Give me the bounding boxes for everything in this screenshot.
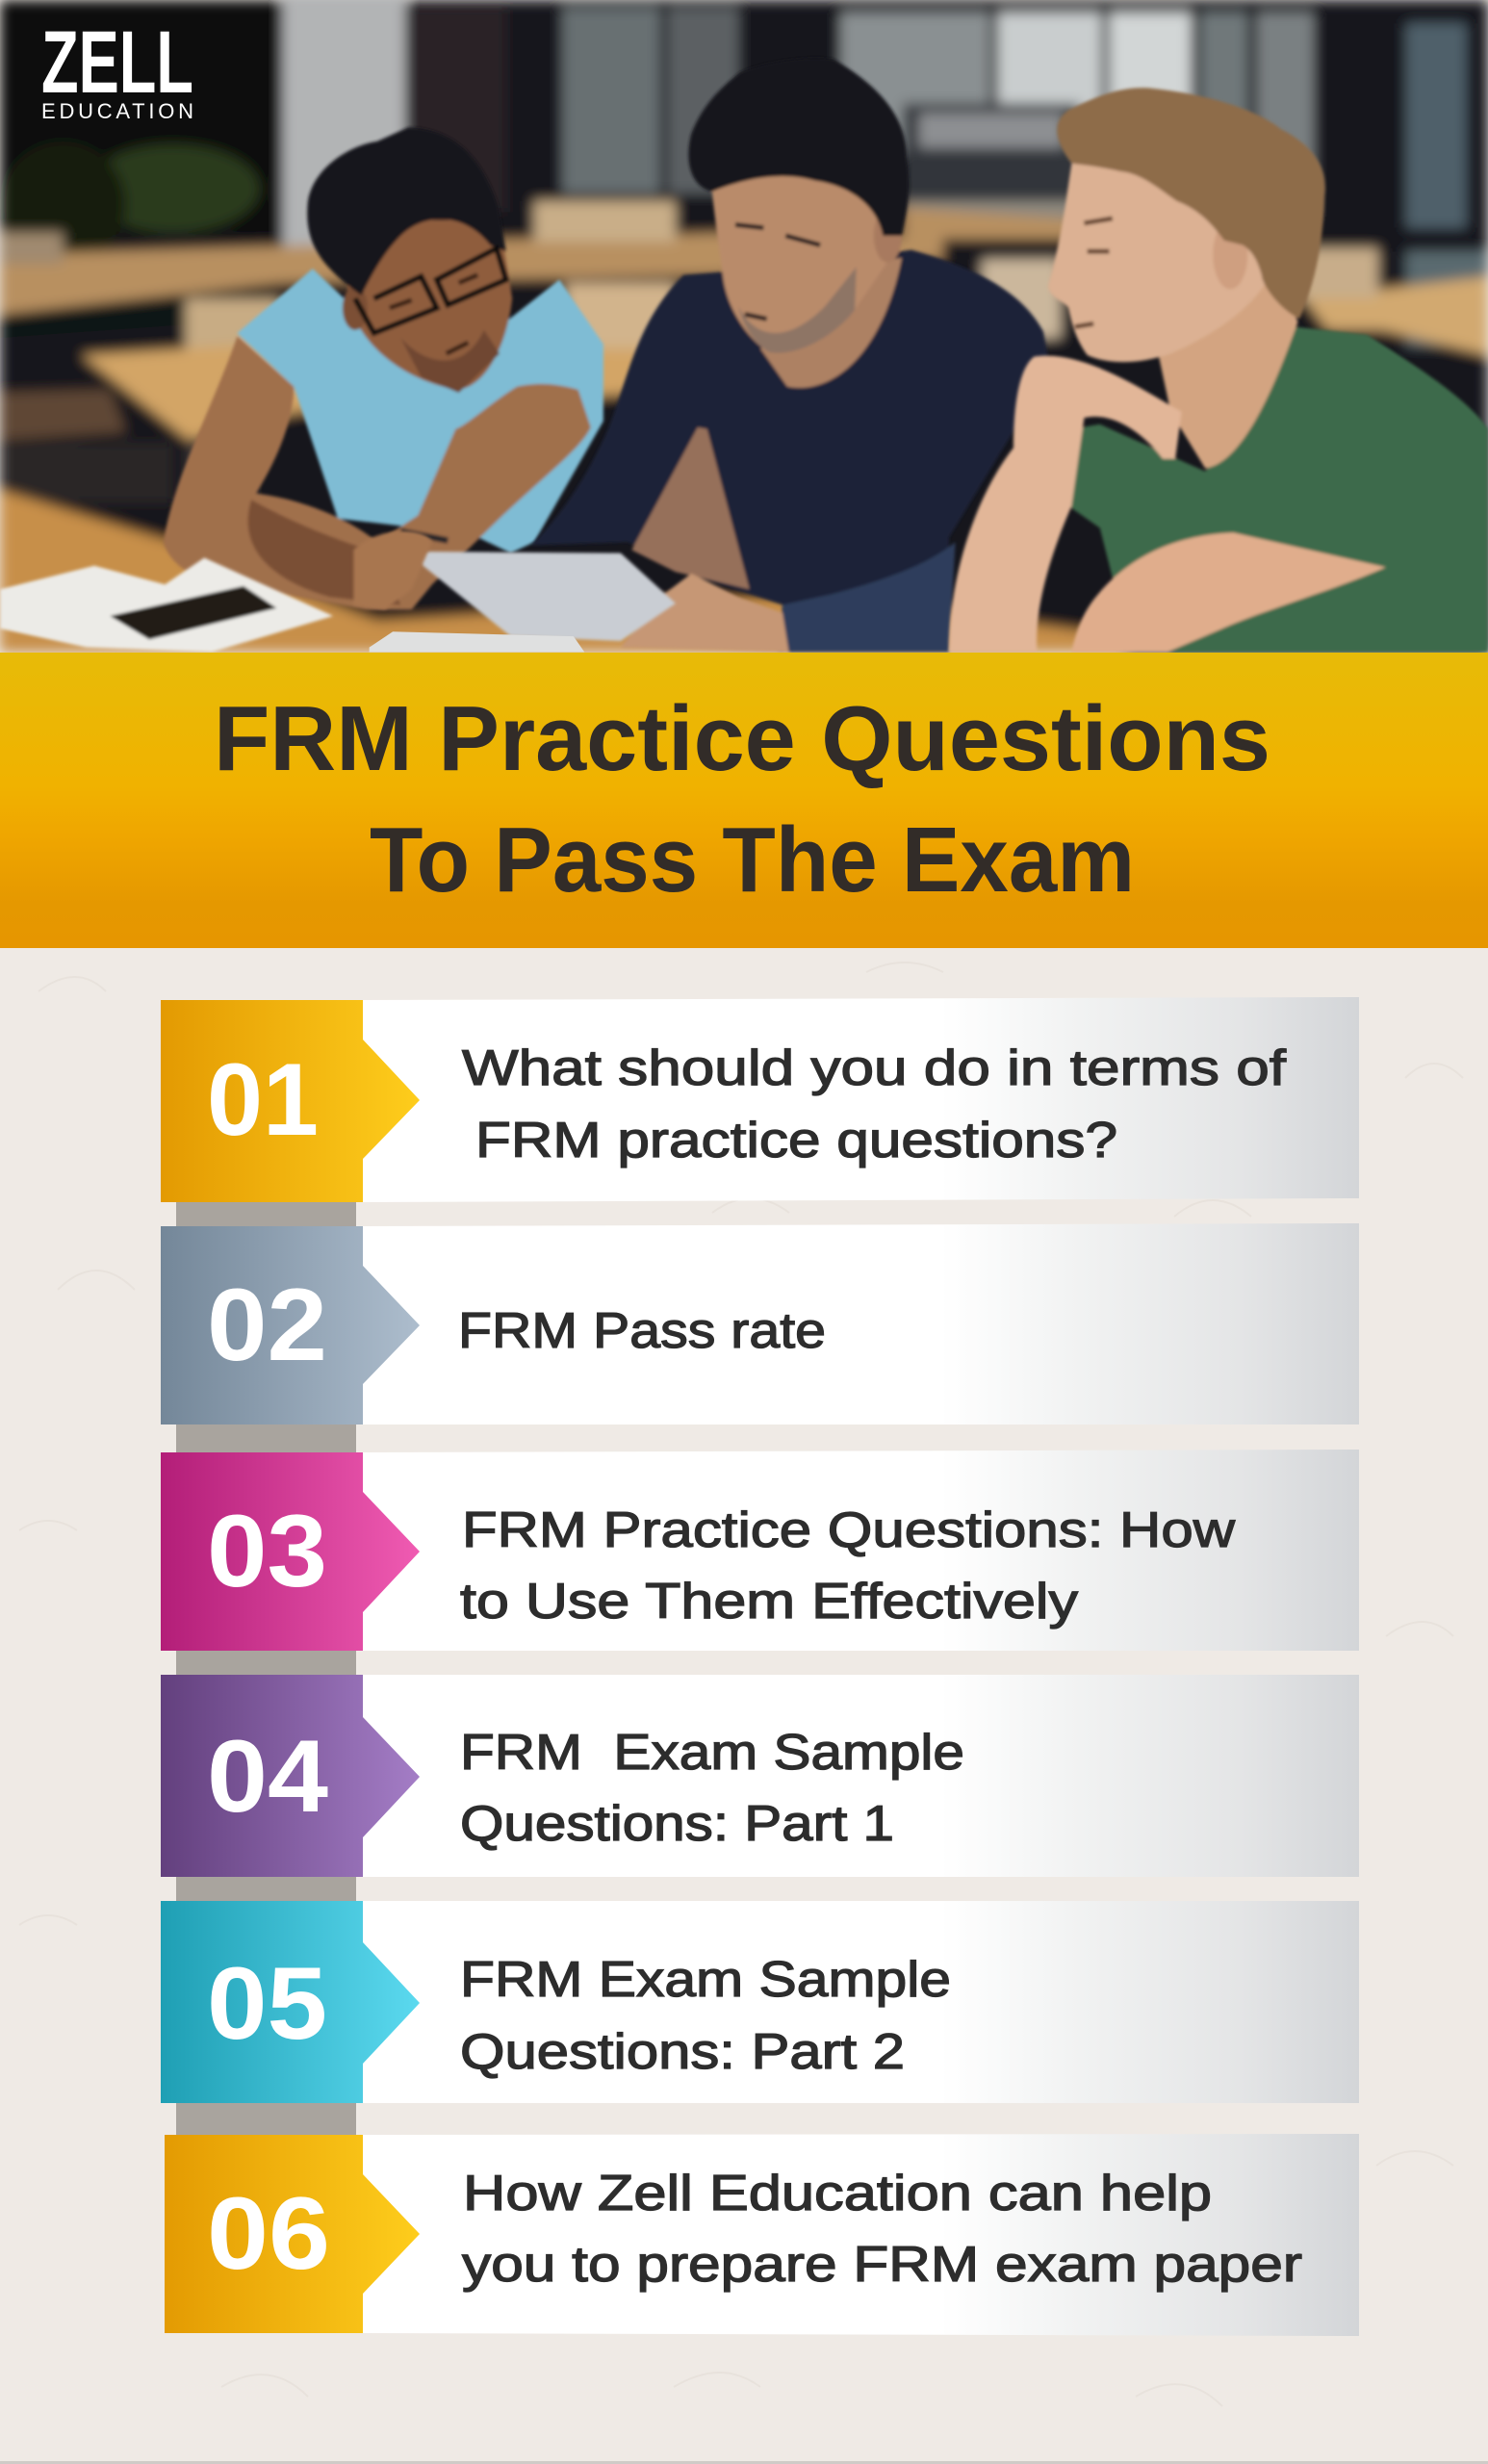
number 02: 02: [207, 1267, 327, 1382]
logo: Zell Education: [41, 13, 193, 123]
heading: To Pass The Exam: [370, 808, 1135, 911]
tablet: [405, 552, 676, 641]
stool seen through the arm gap: [631, 427, 750, 589]
mid table: [82, 346, 644, 440]
item 04: [161, 1675, 1359, 1877]
text 05: FRM Exam Sample: [460, 1952, 951, 2008]
tab and arrow 02: [161, 1226, 420, 1424]
middle man eyes and mouth: [735, 224, 820, 319]
text 04: [460, 1725, 964, 1852]
middle man hair: [688, 58, 909, 236]
middle man sweater: [530, 247, 1048, 607]
panel 05: [363, 1901, 1359, 2103]
right man eye and mouth: [1075, 218, 1113, 327]
text 03: to Use Them Effectively: [460, 1574, 1078, 1630]
tab and arrow 04: [161, 1675, 420, 1877]
text 06: How Zell Education can help: [463, 2166, 1212, 2221]
number 06: 06: [207, 2175, 330, 2291]
left student glasses: [355, 248, 506, 333]
person: right man: [949, 88, 1488, 652]
right man ear: [1213, 220, 1247, 289]
text 03: FRM Practice Questions: How: [462, 1502, 1236, 1558]
left student hair: [307, 127, 506, 295]
left student eyes and mouth: [390, 275, 477, 353]
text 04: FRM Exam Sample: [460, 1725, 964, 1781]
text 05: [460, 1952, 951, 2080]
middle man hand on tablet: [621, 574, 789, 652]
far table: [0, 233, 942, 314]
right man hair: [1057, 88, 1325, 319]
logo wordmark: ZELL: [41, 13, 193, 112]
item 02: [161, 1223, 1359, 1424]
left student arms: [164, 336, 591, 609]
heading: FRM Practice Questions: [214, 687, 1270, 790]
item 06: [165, 2134, 1359, 2336]
panel 04: [363, 1675, 1359, 1877]
logo subtitle: EDUCATION: [41, 99, 193, 123]
text 04: Questions: Part 1: [460, 1796, 894, 1852]
left student face: [347, 220, 512, 390]
number 01: 01: [207, 1041, 319, 1157]
text 03: [460, 1502, 1236, 1630]
text 01: [462, 1040, 1287, 1168]
title band: [0, 653, 1488, 948]
item 03: [161, 1450, 1359, 1651]
left student hand: [353, 531, 432, 609]
tab and arrow 05: [161, 1901, 420, 2103]
right man arm: [949, 356, 1182, 652]
text 05: Questions: Part 2: [460, 2024, 905, 2080]
heading: [214, 687, 1270, 911]
tab and arrow 03: [161, 1452, 420, 1651]
number 03: 03: [207, 1493, 327, 1608]
panel 01: [363, 997, 1359, 1202]
text 02: FRM Pass rate: [458, 1303, 826, 1359]
near table: [0, 490, 1123, 652]
connector strips: [176, 1202, 356, 2136]
panel 02: [363, 1223, 1359, 1424]
left student shirt: [238, 269, 603, 553]
right man neck: [1155, 259, 1297, 468]
item 05: [161, 1901, 1359, 2103]
right man shirt: [1068, 327, 1488, 652]
person: middle man: [531, 58, 1048, 652]
person: left student: [164, 127, 603, 609]
panel 06: [363, 2134, 1359, 2336]
tab and arrow 01: [161, 1000, 420, 1202]
photo: three students studying with a tablet: [0, 0, 1488, 652]
panel 03: [363, 1450, 1359, 1651]
number 05: 05: [207, 1945, 327, 2061]
pen: [400, 531, 448, 541]
item 01: [161, 997, 1359, 1202]
paper on table: [370, 631, 584, 652]
text 01: FRM practice questions?: [475, 1113, 1117, 1168]
right table: [1304, 276, 1488, 355]
text 01: What should you do in terms of: [462, 1040, 1287, 1096]
text 06: you to prepare FRM exam paper: [462, 2237, 1302, 2293]
photo background: cafe room: [0, 0, 1488, 652]
text 06: [462, 2166, 1302, 2293]
middle man neck: [760, 258, 902, 388]
middle man face: [708, 173, 885, 348]
notebook and phone: [0, 558, 333, 652]
number 04: 04: [207, 1718, 328, 1834]
tab and arrow 06: [165, 2135, 420, 2333]
right man face: [1048, 149, 1280, 362]
